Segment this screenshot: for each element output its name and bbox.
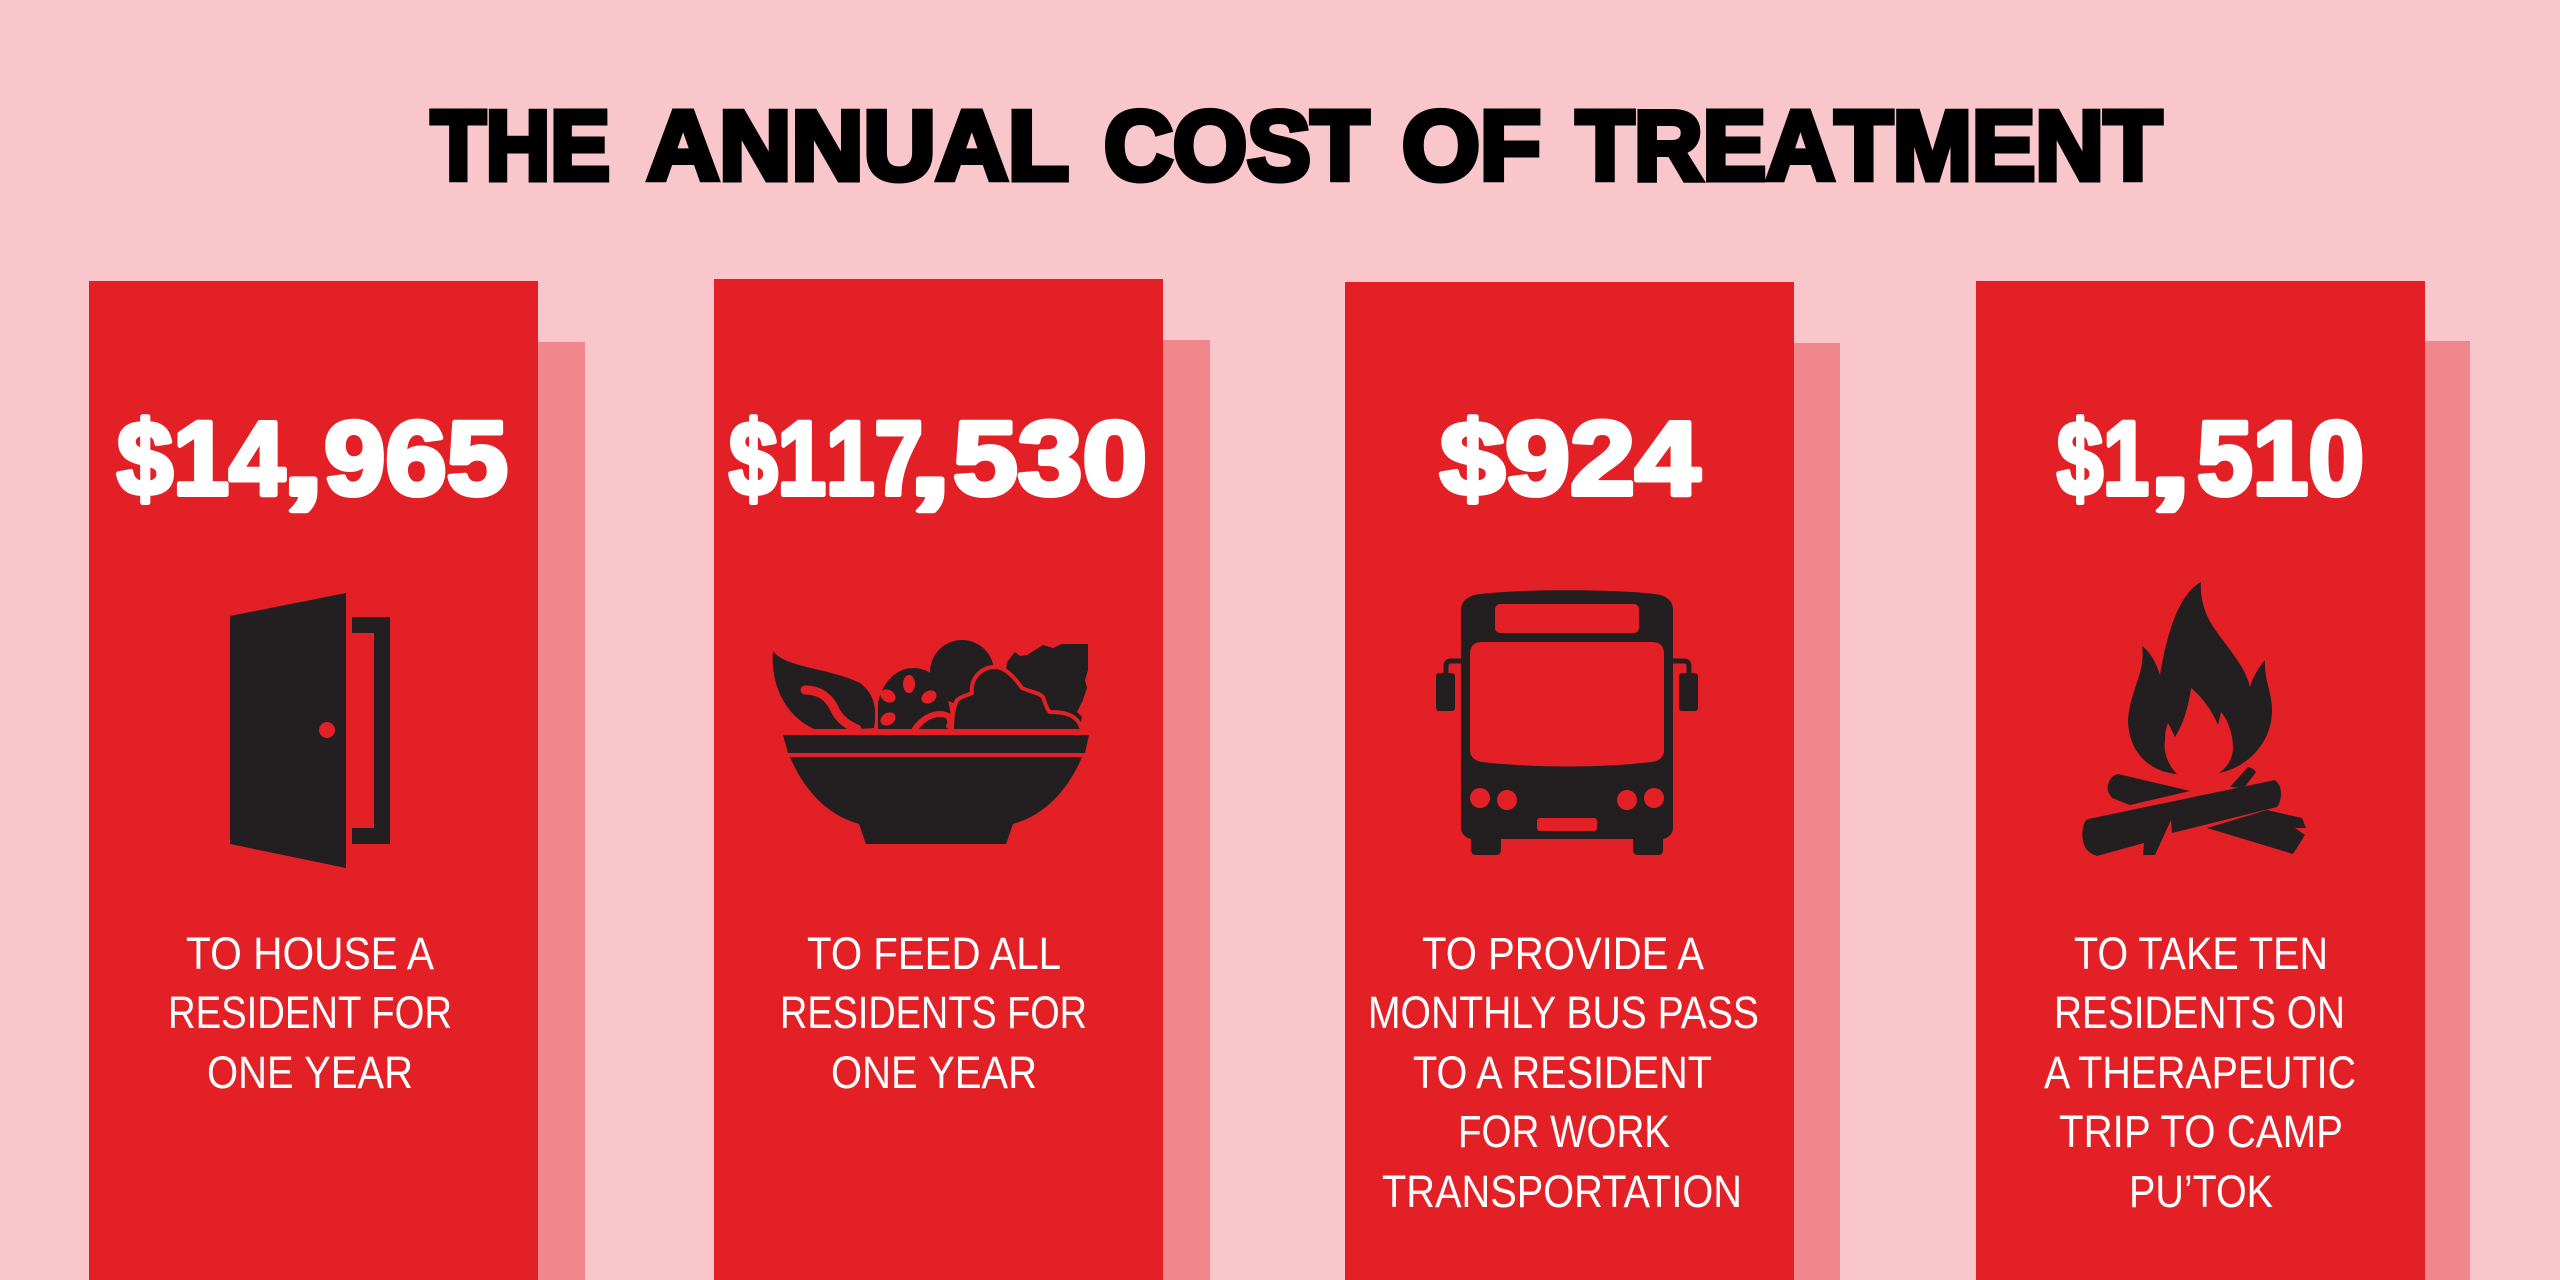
title: COST: [1104, 90, 1369, 200]
caption: camp trip: [2044, 928, 2356, 1217]
caption: camp trip: TRIP TO CAMP: [2059, 1106, 2343, 1157]
caption: food: ONE YEAR: [831, 1047, 1037, 1098]
caption: transportation: MONTHLY BUS PASS: [1368, 987, 1759, 1038]
caption: camp trip: PU’TOK: [2129, 1166, 2273, 1217]
caption: housing: ONE YEAR: [207, 1047, 413, 1098]
title: [431, 90, 2162, 200]
panel card: camp trip: [1976, 281, 2425, 1280]
amount: camp trip: ,: [2149, 400, 2191, 518]
amount: camp trip: [2057, 400, 2364, 518]
panel: food: [714, 279, 1210, 1280]
icon: bus: [1436, 590, 1698, 855]
amount: housing: 965: [324, 400, 508, 518]
panel card: transportation: [1345, 282, 1794, 1280]
caption: housing: RESIDENT FOR: [168, 987, 452, 1038]
panel card: housing: [89, 281, 538, 1280]
title: ANNUAL: [647, 90, 1069, 200]
caption: transportation: TRANSPORTATION: [1382, 1166, 1742, 1217]
amount: housing: $14: [117, 400, 285, 518]
panel: housing: [89, 281, 585, 1280]
icon: campfire: [2082, 582, 2306, 856]
caption: transportation: [1368, 928, 1759, 1217]
caption: camp trip: A THERAPEUTIC: [2044, 1047, 2356, 1098]
amount: food: ,: [909, 400, 951, 518]
caption: camp trip: TO TAKE TEN: [2074, 928, 2328, 979]
caption: camp trip: RESIDENTS ON: [2054, 987, 2345, 1038]
amount: transportation: $924: [1440, 400, 1700, 518]
caption: transportation: TO PROVIDE A: [1422, 928, 1704, 979]
title: OF: [1402, 90, 1541, 200]
amount: camp trip: $1: [2057, 400, 2149, 518]
amount: food: 530: [953, 400, 1147, 518]
caption: food: [780, 928, 1087, 1098]
title: THE: [431, 90, 610, 200]
amount: food: $117: [729, 400, 923, 518]
amount: housing: [117, 400, 508, 518]
panel: transportation: [1345, 282, 1840, 1280]
title: TREATMENT: [1576, 90, 2162, 200]
amount: camp trip: 510: [2197, 400, 2364, 518]
icon: door: [230, 593, 390, 868]
caption: food: RESIDENTS FOR: [780, 987, 1087, 1038]
caption: transportation: TO A RESIDENT: [1413, 1047, 1712, 1098]
amount: housing: ,: [282, 400, 324, 518]
caption: transportation: FOR WORK: [1458, 1106, 1670, 1157]
caption: food: TO FEED ALL: [807, 928, 1061, 979]
caption: housing: TO HOUSE A: [186, 928, 434, 979]
panel shadow: housing: [500, 342, 585, 1280]
icon: salad bowl: [770, 640, 1100, 844]
amount: food: [729, 400, 1147, 518]
panel shadow: food: [1120, 340, 1210, 1280]
caption: housing: [168, 928, 452, 1098]
panel card: food: [714, 279, 1163, 1280]
panel shadow: camp trip: [2380, 341, 2470, 1280]
panel: camp trip: [1976, 281, 2470, 1280]
panel shadow: transportation: [1750, 343, 1840, 1280]
